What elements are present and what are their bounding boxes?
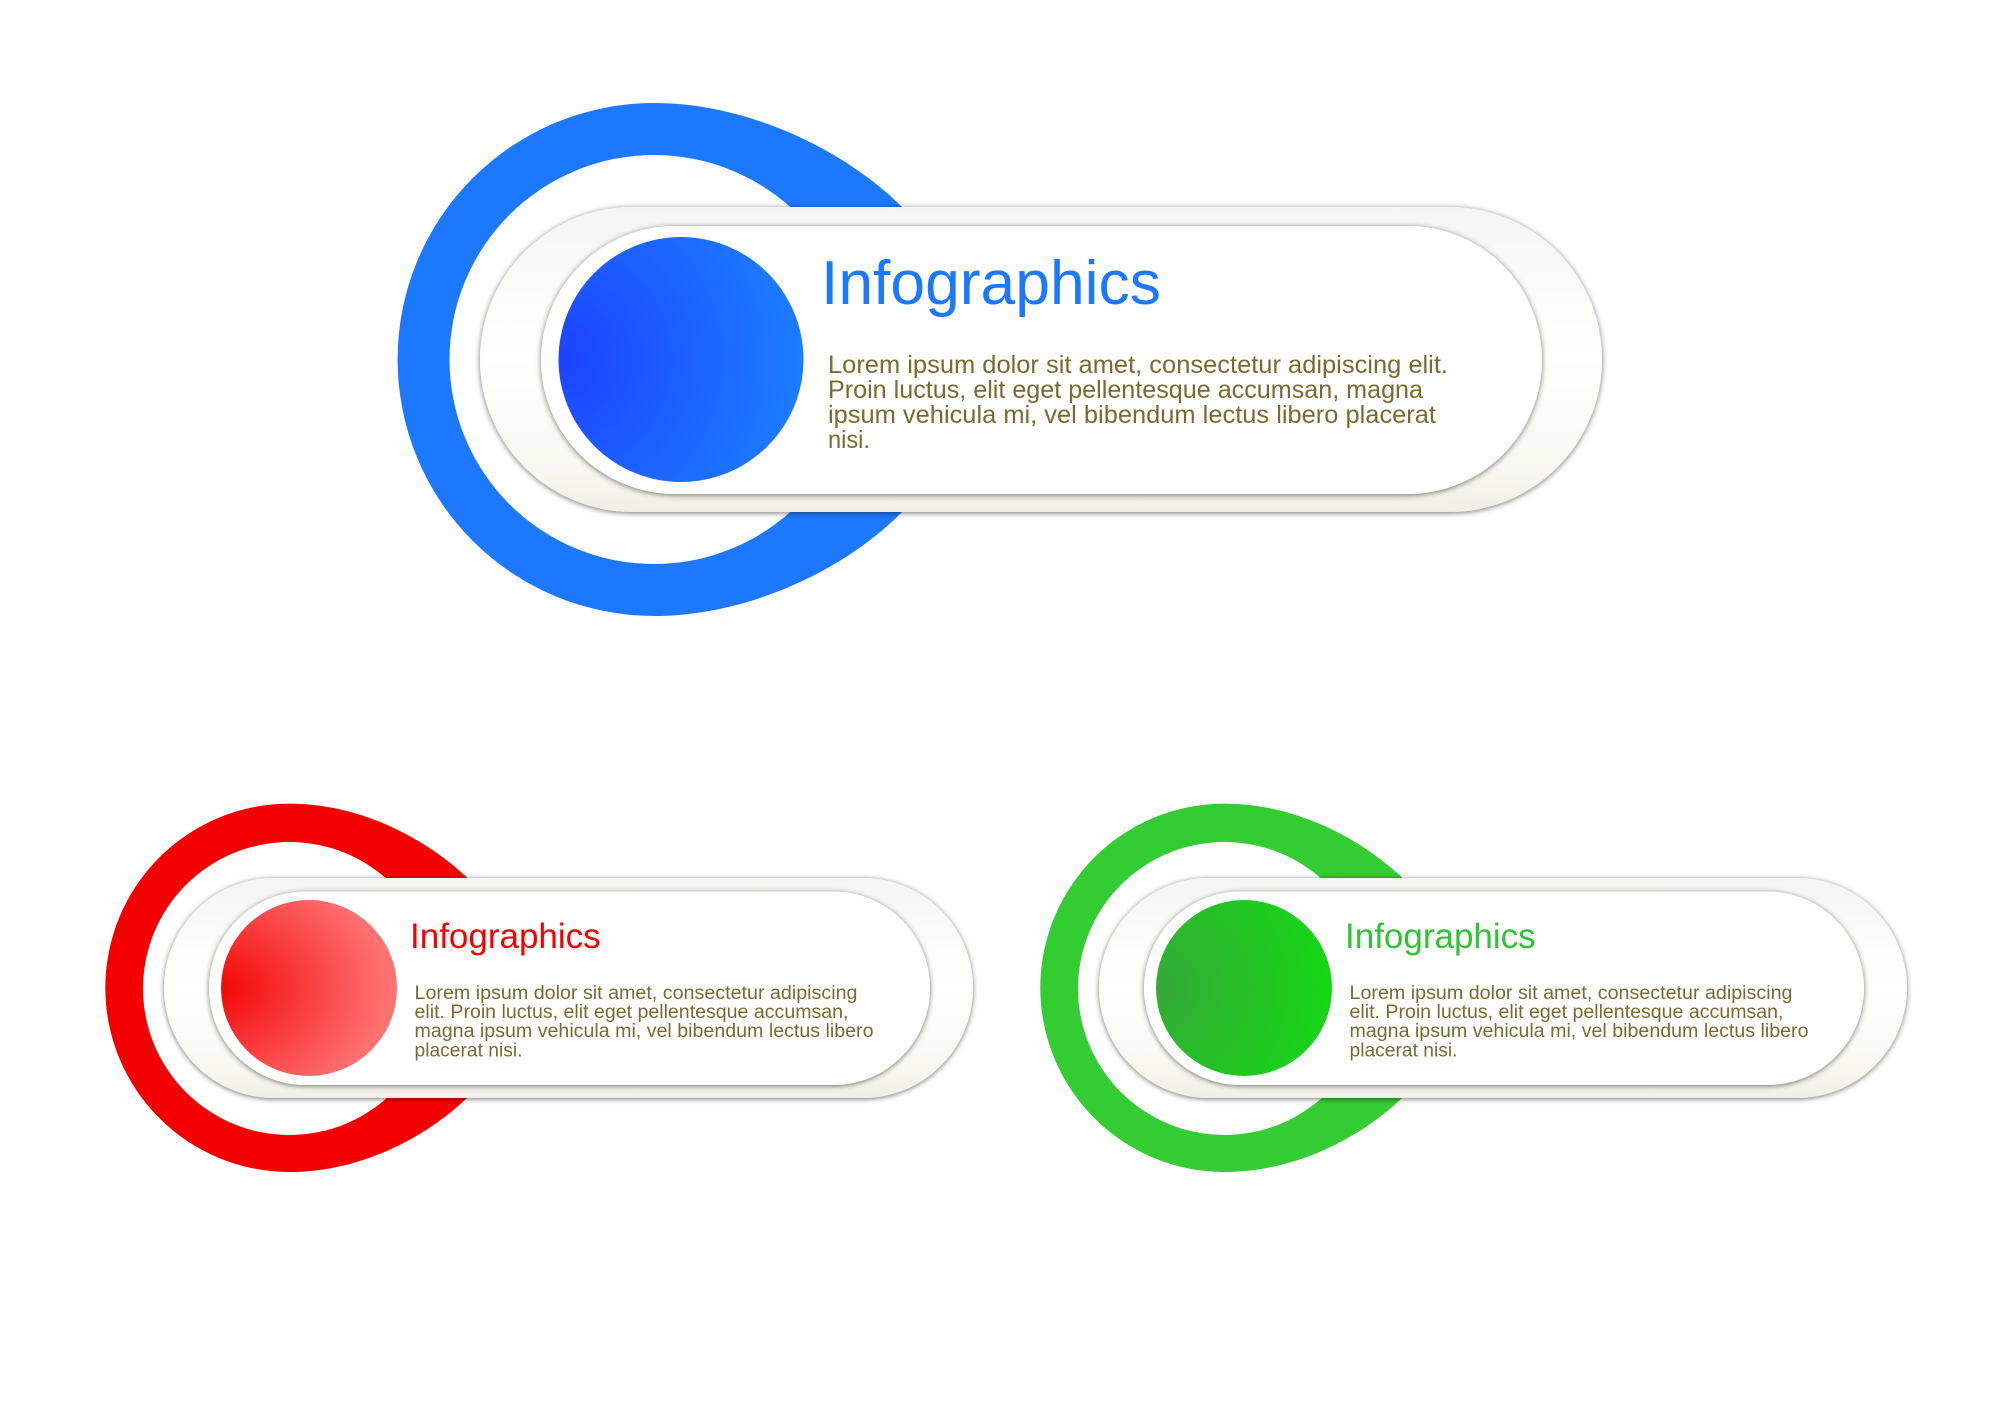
inner white pill xyxy=(541,226,1542,494)
blue gradient circle xyxy=(558,237,804,482)
green body text xyxy=(1350,983,1808,1062)
blue body text: Proin luctus, elit eget pellentesque accumsan, magna xyxy=(828,376,1423,404)
red teardrop ring xyxy=(105,804,467,1172)
blue body text: Lorem ipsum dolor sit amet, consectetur adipiscing elit. xyxy=(828,351,1448,379)
red body text: magna ipsum vehicula mi, vel bibendum lectus libero xyxy=(414,1021,874,1042)
green body text: placerat nisi. xyxy=(1350,1040,1458,1062)
green body text: Lorem ipsum dolor sit amet, consectetur adipiscing xyxy=(1350,983,1792,1004)
red body text: placerat nisi. xyxy=(414,1040,522,1062)
red body text: Lorem ipsum dolor sit amet, consectetur adipiscing xyxy=(414,983,858,1004)
outer cream pill xyxy=(164,878,973,1098)
green teardrop ring xyxy=(1040,804,1402,1172)
red body text xyxy=(414,983,874,1062)
green body text: magna ipsum vehicula mi, vel bibendum lectus libero xyxy=(1350,1021,1808,1042)
green body text: elit. Proin luctus, elit eget pellentesque accumsan, xyxy=(1350,1002,1784,1023)
blue heading: Infographics xyxy=(821,249,1161,318)
blue body text xyxy=(828,351,1448,454)
green gradient circle xyxy=(1156,900,1332,1076)
panel: blue infographic xyxy=(398,103,1602,616)
red body text: elit. Proin luctus, elit eget pellentesque accumsan, xyxy=(414,1002,848,1023)
blue body text: ipsum vehicula mi, vel bibendum lectus libero placerat xyxy=(828,401,1436,429)
outer cream pill xyxy=(480,207,1602,512)
blue teardrop ring xyxy=(398,103,902,616)
panel: green infographic xyxy=(1040,804,1907,1172)
green heading: Infographics xyxy=(1345,917,1536,956)
inner white pill xyxy=(209,892,930,1085)
outer cream pill xyxy=(1099,878,1907,1098)
red gradient circle xyxy=(221,900,397,1076)
blue body text: nisi. xyxy=(828,426,870,454)
panel: red infographic xyxy=(105,804,973,1172)
red heading: Infographics xyxy=(410,917,601,956)
inner white pill xyxy=(1144,892,1864,1085)
